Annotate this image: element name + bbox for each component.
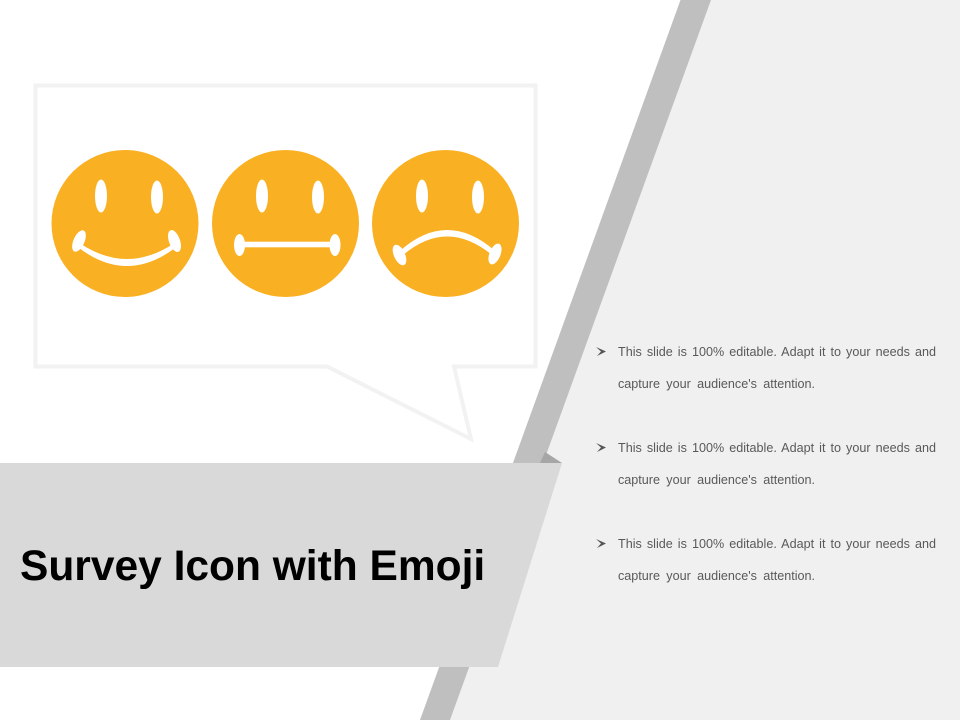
- title: Survey Icon with Emoji: [20, 543, 485, 590]
- text block 2: [596, 440, 936, 486]
- icon: happy emoji: [52, 150, 198, 297]
- icon: sad emoji: [372, 150, 519, 297]
- banner fold triangle: [540, 452, 562, 463]
- diagonal grey band: [420, 0, 711, 720]
- text block 1: [596, 344, 936, 390]
- text block 3: [596, 536, 936, 582]
- text block 2: This slide is 100% editable. Adapt it to your needs and: [618, 440, 936, 454]
- text block 2: capture your audience's attention.: [618, 472, 815, 486]
- speech bubble outline: [36, 86, 536, 439]
- text block 3: capture your audience's attention.: [618, 568, 815, 582]
- text block 3: This slide is 100% editable. Adapt it to your needs and: [618, 536, 936, 550]
- title banner: [0, 463, 562, 667]
- text block 1: capture your audience's attention.: [618, 376, 815, 390]
- panel: right grey background: [450, 0, 960, 720]
- icon: neutral emoji: [212, 150, 359, 297]
- text block 1: This slide is 100% editable. Adapt it to your needs and: [618, 344, 936, 358]
